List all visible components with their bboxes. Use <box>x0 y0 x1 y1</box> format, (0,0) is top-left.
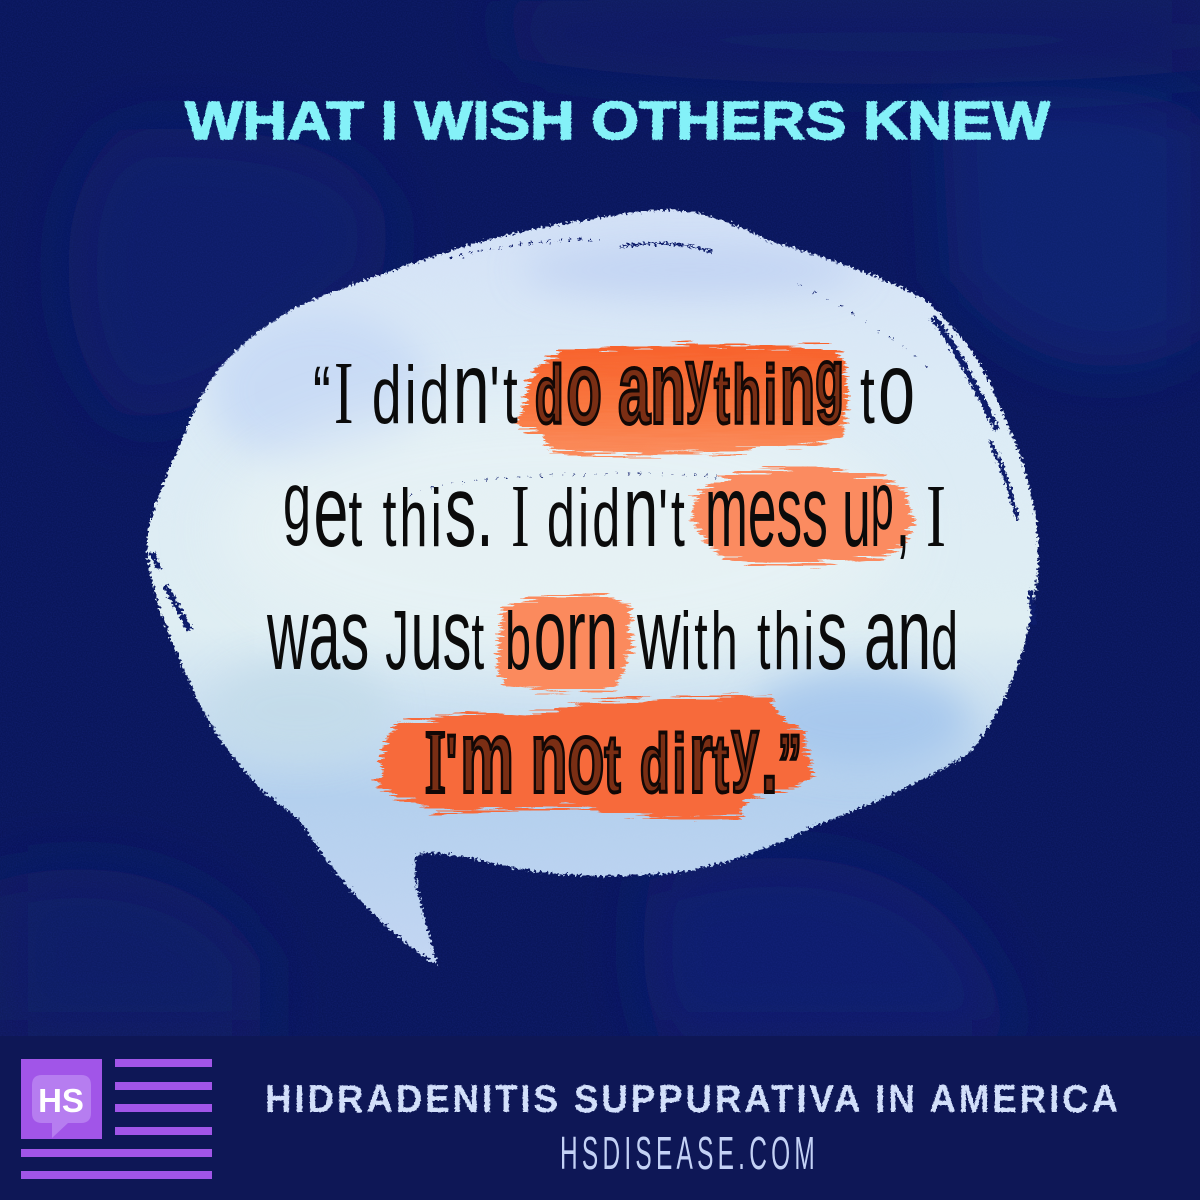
line 4: emphasis: I'm not dirty.” <box>425 700 805 814</box>
speech bubble <box>147 210 1038 965</box>
emphasis: mess up: mess up, <box>705 454 910 568</box>
highlight: born <box>497 594 632 692</box>
emphasis: born: born <box>505 577 618 691</box>
footer band <box>0 1036 1200 1200</box>
title: WHAT I WISH OTHERS KNEW <box>185 91 1050 151</box>
word: to: to <box>860 331 915 445</box>
line 3 <box>266 577 961 691</box>
footer heading: HIDRADENITIS SUPPURATIVA IN AMERICA <box>265 1078 1121 1121</box>
line 2: get this. I didn't <box>283 454 688 568</box>
line 2 <box>283 454 946 568</box>
line 3: was Just <box>266 577 487 691</box>
line 1: “I didn't <box>313 331 521 445</box>
footer url: HSDISEASE.COM <box>560 1127 819 1179</box>
logo: HS flag <box>21 1059 212 1179</box>
highlight: mess up <box>690 467 914 566</box>
line 1 <box>313 331 915 445</box>
highlight: do anything <box>516 344 848 456</box>
quote text <box>266 331 961 814</box>
word: I: I <box>926 467 946 566</box>
logo: HS flag: HS <box>38 1082 84 1119</box>
highlight: I'm not dirty <box>376 696 812 820</box>
line 3: with this and <box>636 577 961 691</box>
emphasis: do anything: do anything <box>535 331 846 445</box>
